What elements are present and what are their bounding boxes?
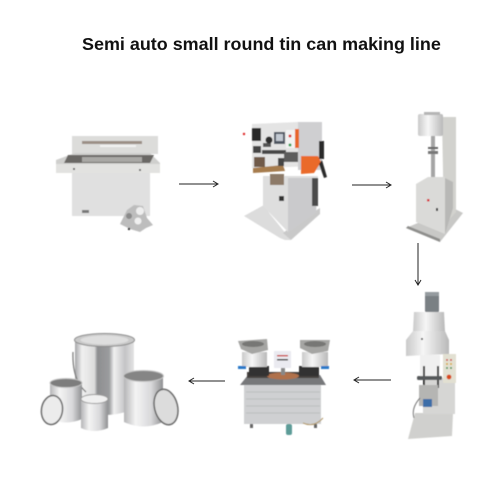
machine 3 spindle bbox=[431, 136, 435, 178]
machine 5 left feeder bbox=[238, 339, 269, 376]
machine 2 base bbox=[244, 205, 291, 240]
title: Semi auto small round tin can making line bbox=[82, 34, 441, 54]
machine 1 cabinet bbox=[72, 173, 150, 216]
machine 1: sheet feeding table bbox=[56, 136, 160, 232]
machine 2 welding arm bbox=[253, 165, 285, 173]
machine 4 motor bbox=[425, 292, 439, 312]
machine 4 table bbox=[417, 376, 442, 380]
machine 1 motor bbox=[120, 205, 153, 232]
machine 3 base bbox=[406, 208, 463, 242]
machine 2: seam welder bbox=[243, 122, 327, 240]
machine 4 control panel bbox=[443, 354, 456, 383]
machine 4: seaming machine bbox=[406, 292, 456, 439]
machine 3 column bbox=[442, 117, 456, 226]
machine 2 controls bbox=[312, 178, 318, 206]
arrow 5 bbox=[189, 378, 225, 384]
machine 3 drum bbox=[418, 114, 443, 136]
arrow 2 bbox=[352, 182, 391, 188]
large can bbox=[73, 334, 134, 415]
machine 4 base bbox=[408, 413, 453, 439]
left lid bbox=[40, 394, 64, 426]
front small can bbox=[81, 394, 108, 431]
machine 5: double bowl feeder machine bbox=[238, 339, 330, 435]
right lid bbox=[150, 387, 182, 427]
machine 4 dome bbox=[413, 312, 445, 332]
tin cans bbox=[40, 334, 182, 431]
machine 3 cabinet bbox=[416, 177, 445, 234]
arrow 1 bbox=[179, 181, 218, 187]
machine 5 control box bbox=[274, 351, 291, 375]
machine 5 top plate bbox=[240, 375, 326, 385]
machine 1 rear panel bbox=[72, 136, 158, 154]
right can bbox=[124, 370, 164, 426]
machine 2 orange guard bbox=[301, 156, 321, 174]
arrow 4 bbox=[354, 377, 391, 383]
small left can bbox=[50, 378, 82, 422]
machine 5 right feeder bbox=[299, 340, 330, 376]
machine 3: flanging machine bbox=[406, 112, 463, 242]
arrow 3 bbox=[415, 243, 421, 285]
machine 5 feet and hose bbox=[250, 418, 323, 435]
machine 5 cabinet bbox=[244, 385, 321, 424]
machine 4 column bbox=[420, 355, 440, 377]
machine 2 head bbox=[252, 122, 322, 168]
